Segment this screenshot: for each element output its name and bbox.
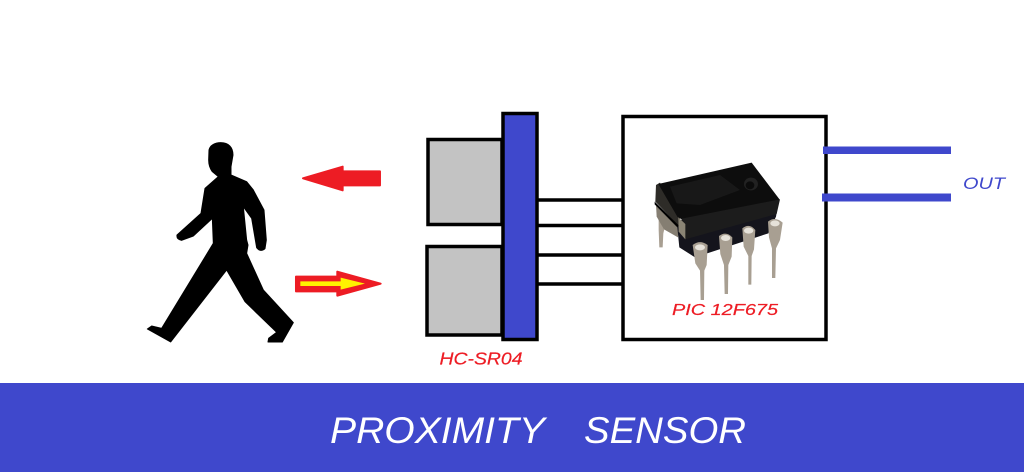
label: OUT: OUT <box>963 174 1007 193</box>
title: SENSOR: SENSOR <box>584 409 746 451</box>
output line 1 <box>823 146 951 154</box>
chip top texture <box>670 175 740 205</box>
chip end facet <box>678 217 685 239</box>
pin highlights <box>695 220 780 250</box>
sensor: upper transducer <box>428 140 502 224</box>
title banner <box>0 383 1024 472</box>
chip left end <box>655 183 680 226</box>
arrow: emitted signal pointing right <box>296 272 381 296</box>
chip front face <box>682 199 780 239</box>
connection wires <box>538 200 623 284</box>
output line 2 <box>822 194 951 202</box>
icon: walking person <box>147 143 293 342</box>
chip lower body <box>677 203 778 257</box>
chip notch <box>744 178 758 190</box>
sensor: lower transducer <box>427 246 502 335</box>
sensor: blue circuit board <box>503 114 537 340</box>
back left pin <box>659 217 665 247</box>
label: HC-SR04: HC-SR04 <box>440 348 523 368</box>
title: PROXIMITY: PROXIMITY <box>330 409 548 451</box>
icon: DIP-8 chip <box>655 163 783 300</box>
arrow: reflected signal pointing left <box>303 167 380 190</box>
microcontroller box <box>623 116 826 340</box>
front pins <box>693 219 783 300</box>
chip top <box>658 163 780 219</box>
label: PIC 12F675: PIC 12F675 <box>672 302 778 319</box>
